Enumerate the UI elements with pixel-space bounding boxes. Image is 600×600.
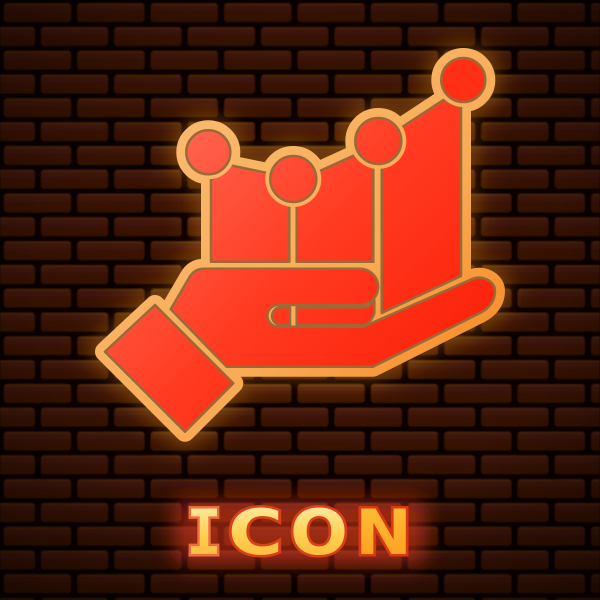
- text glow: wash: [172, 498, 428, 566]
- fingertip: [272, 307, 290, 325]
- hand: [171, 269, 495, 367]
- data point 1: [181, 125, 235, 179]
- label: ICON: [172, 496, 428, 569]
- letter I: I: [186, 496, 222, 569]
- chart panel: middle: [297, 155, 373, 262]
- chart panel: right: [382, 100, 461, 313]
- letter O: O: [290, 496, 348, 569]
- finger segment: [297, 300, 374, 325]
- letter C: C: [228, 496, 283, 569]
- text glow: bricks: [172, 496, 428, 568]
- data point 2: [265, 151, 321, 207]
- icon orange outline: [105, 58, 495, 432]
- icon glow on bricks: [105, 58, 495, 432]
- sleeve cuff: [105, 305, 233, 432]
- icon: hand holding growth chart: [105, 53, 495, 432]
- data point 4: [436, 53, 490, 107]
- chart panel: left: [211, 165, 289, 262]
- letter N: N: [355, 496, 412, 569]
- data point 3: [350, 113, 406, 169]
